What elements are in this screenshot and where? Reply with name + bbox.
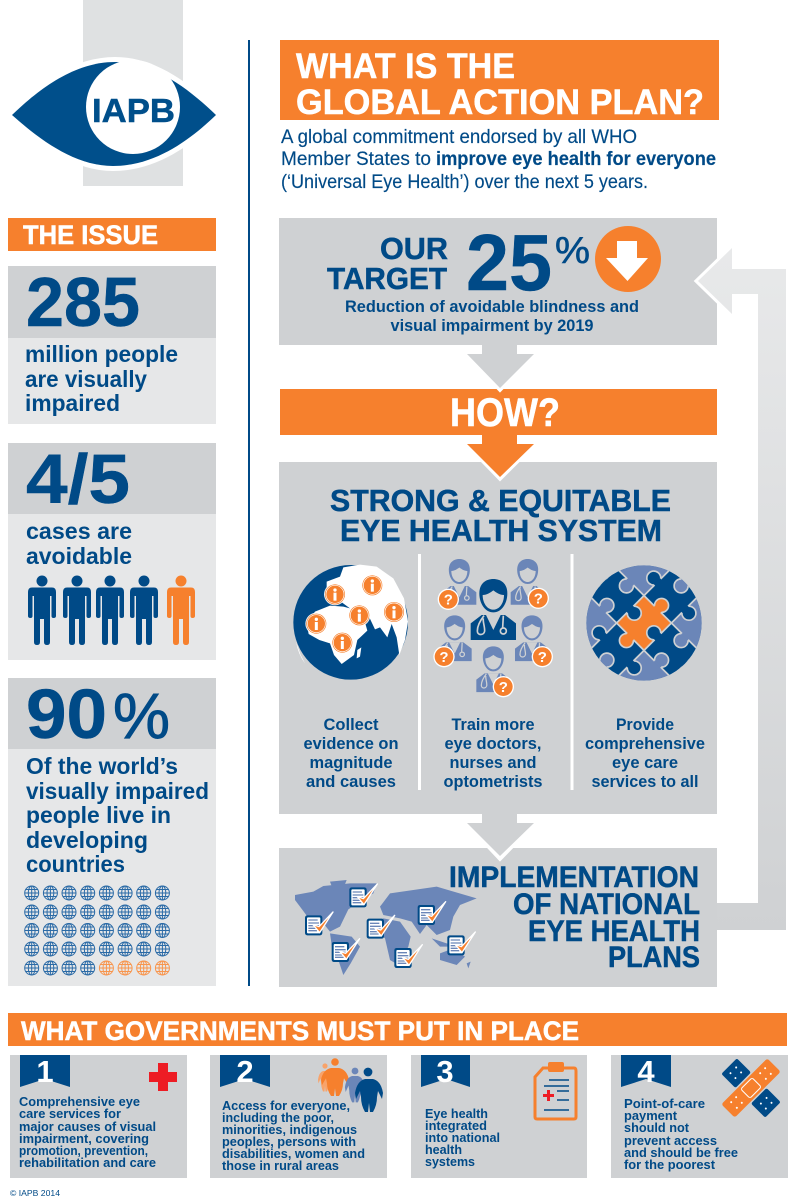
title banner [280, 40, 719, 122]
arrow: how to system [467, 435, 534, 478]
panel: 4/5 avoidable [8, 440, 216, 660]
panel: strong and equitable eye health system [279, 462, 717, 814]
card 1: comprehensive services: Comprehensive eye [19, 1094, 140, 1109]
arrow: target to how [467, 345, 534, 389]
panel: strong and equitable eye health system: STRONG & EQUITABLE [330, 484, 671, 518]
text: provide services: services to all [592, 773, 698, 791]
card 2: access for everyone [210, 1054, 387, 1178]
panel: 285 million [8, 263, 216, 424]
panel: 90 percent: people live in [26, 802, 171, 828]
section heading: what governments must put in place [8, 1013, 787, 1046]
text: collect evidence: magnitude [310, 754, 392, 772]
card 1: comprehensive services: rehabilitation and care [19, 1155, 156, 1170]
panel: our target: visual impairment by 2019 [390, 317, 594, 335]
card 2: access for everyone: minorities, indigenous [222, 1122, 357, 1137]
panel: implementation of national eye health plans: PLANS [608, 941, 700, 974]
panel: 4/5 avoidable: cases are [26, 518, 132, 544]
icon: bandage [706, 1043, 794, 1133]
card 4: point of care payment: prevent access [624, 1133, 717, 1148]
text: provide services: Provide [616, 716, 674, 734]
icon: five people [28, 576, 195, 645]
card 2: access for everyone: those in rural areas [222, 1158, 339, 1173]
text: collect evidence: and causes [306, 773, 396, 791]
icon: globe with info markers [293, 565, 408, 680]
panel: strong and equitable eye health system: EYE HEALTH SYSTEM [340, 514, 662, 548]
card 3: eye health integrated: systems [425, 1154, 475, 1169]
panel: 90 percent [8, 675, 216, 986]
text: train more: optometrists [444, 773, 542, 791]
card 1: comprehensive services: 1 [36, 1054, 54, 1089]
icon: eye care workers [433, 559, 553, 697]
text: train more: Train more [452, 716, 534, 734]
card 4: point of care payment: Point-of-care [624, 1096, 705, 1111]
panel: implementation of national eye health plans: OF NATIONAL [513, 888, 700, 921]
text: provide services: eye care [612, 754, 678, 772]
panel: our target: OUR [380, 231, 448, 266]
text: train more [444, 716, 542, 791]
card 3: eye health integrated: Eye health [425, 1106, 488, 1121]
panel: 90 percent: developing [26, 827, 148, 853]
panel: 4/5 avoidable: 4/5 [26, 440, 130, 518]
card 2: access for everyone: peoples, persons with [222, 1134, 356, 1149]
intro text: A global commitment endorsed by all WHO [281, 126, 637, 148]
icon: red cross [149, 1063, 177, 1091]
panel: our target: % [555, 230, 590, 271]
panel: 90 percent: % [113, 680, 170, 752]
feedback arrow [698, 248, 786, 930]
card 4: point of care payment: 4 [637, 1054, 655, 1089]
icon: puzzle globe [586, 565, 702, 681]
card 4: point of care payment: for the poorest [624, 1157, 716, 1172]
panel: our target: TARGET [327, 261, 447, 296]
card 1: comprehensive services: major causes of visual [19, 1119, 156, 1134]
text: provide services [585, 716, 705, 791]
text: train more: nurses and [450, 754, 536, 772]
title banner: GLOBAL ACTION PLAN? [296, 83, 704, 122]
card 3: eye health integrated: 3 [436, 1054, 454, 1089]
icon: world map with checklists [295, 880, 477, 975]
card 1: comprehensive services: care services for [19, 1106, 121, 1121]
intro text: (‘Universal Eye Health’) over the next 5 years. [281, 171, 648, 193]
card 3: eye health integrated [411, 1054, 587, 1178]
panel: 285 million: impaired [25, 390, 120, 416]
how banner [280, 389, 717, 435]
panel: implementation of national eye health plans: IMPLEMENTATION [449, 861, 699, 894]
card 2: access for everyone: disabilities, women and [222, 1146, 365, 1161]
section heading: the issue [8, 218, 216, 251]
panel: 90 percent: 90 [26, 675, 107, 753]
vertical divider [248, 40, 250, 986]
text: collect evidence: Collect [324, 716, 379, 734]
panel: implementation of national eye health plans: EYE HEALTH [528, 915, 700, 948]
panel: our target: Reduction of avoidable blindness and [345, 298, 639, 316]
icon: group of people [318, 1058, 383, 1112]
logo: IAPB eye [12, 0, 216, 186]
intro text [281, 126, 716, 193]
text: provide services: comprehensive [585, 735, 705, 753]
panel: 90 percent: Of the world’s [26, 753, 178, 779]
icon: down arrow circle [595, 226, 661, 292]
intro text: Member States to [281, 148, 431, 170]
card 4: point of care payment: should not [624, 1120, 690, 1135]
section heading: the issue: THE ISSUE [23, 220, 158, 250]
title banner: WHAT IS THE [296, 47, 515, 86]
copyright: © IAPB 2014 [10, 1189, 61, 1198]
section heading: what governments must put in place: WHAT GOVERNMENTS MUST PUT IN PLACE [21, 1016, 579, 1046]
card 4: point of care payment [611, 1043, 794, 1178]
card 4: point of care payment: and should be free [624, 1145, 738, 1160]
icon: grid of globes [25, 886, 169, 975]
panel: 285 million: 285 [26, 263, 140, 341]
panel: 90 percent: countries [26, 851, 125, 877]
card 4: point of care payment: payment [624, 1108, 678, 1123]
card 2: access for everyone: 2 [236, 1054, 254, 1089]
text: train more: eye doctors, [444, 735, 542, 753]
panel: 90 percent: visually impaired [26, 778, 209, 804]
panel: 4/5 avoidable: avoidable [26, 543, 132, 569]
card 3: eye health integrated: integrated [425, 1118, 487, 1133]
panel: our target: 25 [466, 218, 552, 307]
panel: 285 million: million people [25, 341, 178, 367]
panel: implementation of national eye health plans [279, 848, 717, 987]
card 1: comprehensive services: impairment, covering [19, 1131, 149, 1146]
card 3: eye health integrated: health [425, 1142, 462, 1157]
card 3: eye health integrated: into national [425, 1130, 500, 1145]
card 2: access for everyone: Access for everyone, [222, 1098, 350, 1113]
panel: 285 million: are visually [25, 366, 147, 392]
panel: our target [279, 218, 717, 345]
logo: IAPB eye: IAPB [92, 92, 175, 129]
how banner: HOW? [450, 391, 560, 435]
icon: clipboard [535, 1062, 576, 1119]
text: collect evidence: evidence on [304, 735, 398, 753]
text: collect evidence [304, 716, 398, 791]
card 1: comprehensive services [10, 1054, 187, 1178]
intro text: improve eye health for everyone [436, 148, 716, 170]
card 2: access for everyone: including the poor, [222, 1110, 334, 1125]
card 1: comprehensive services: promotion, prevention, [19, 1143, 148, 1158]
arrow: system to implementation [467, 814, 534, 858]
